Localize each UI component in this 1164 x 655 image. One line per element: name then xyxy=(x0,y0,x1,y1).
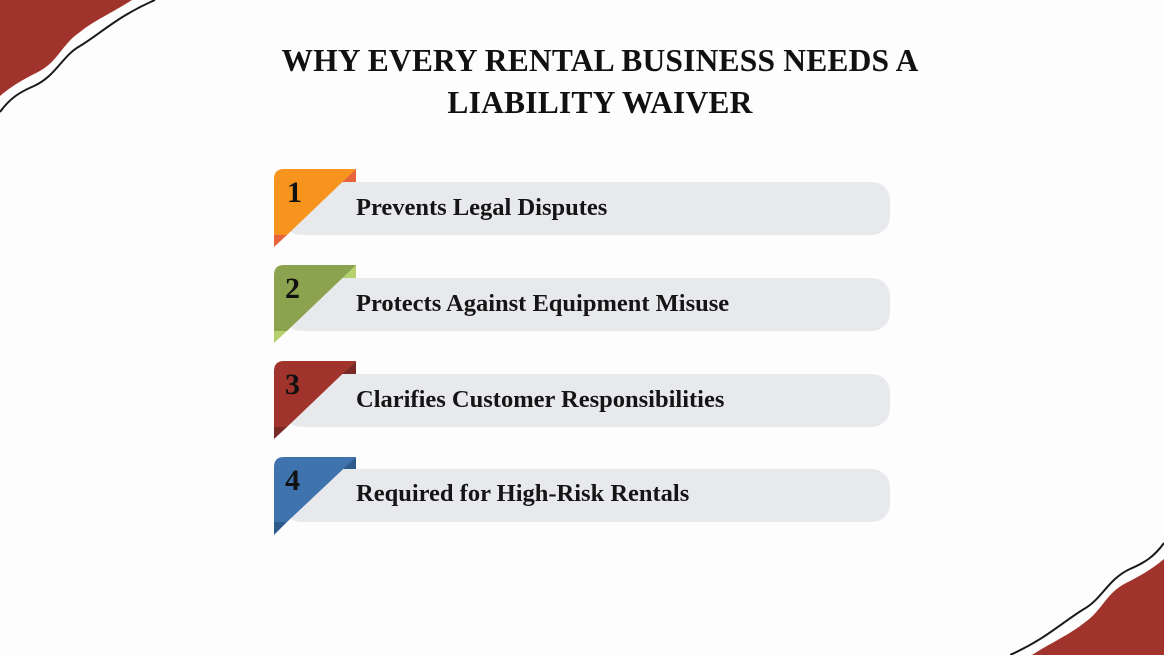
item 4 badge and bar xyxy=(274,457,890,535)
decoration: bottom-right wave corner xyxy=(1010,542,1164,655)
decoration: top-left wave corner xyxy=(0,0,156,113)
title: LIABILITY WAIVER xyxy=(447,85,753,120)
item 2 badge and bar: 2 xyxy=(285,272,300,305)
title: WHY EVERY RENTAL BUSINESS NEEDS A xyxy=(281,43,919,78)
item 1 badge and bar xyxy=(274,169,890,247)
title xyxy=(281,43,919,120)
label 4: Required for High-Risk Rentals xyxy=(356,480,689,507)
item 3 badge and bar xyxy=(274,361,890,439)
item 3 badge and bar: 3 xyxy=(285,368,300,401)
item 2 badge and bar xyxy=(274,265,890,343)
label 1: Prevents Legal Disputes xyxy=(356,194,607,221)
label 2: Protects Against Equipment Misuse xyxy=(356,290,729,317)
item 1 badge and bar: 1 xyxy=(287,176,302,209)
item 4 badge and bar: 4 xyxy=(285,464,300,497)
label 3: Clarifies Customer Responsibilities xyxy=(356,386,724,413)
